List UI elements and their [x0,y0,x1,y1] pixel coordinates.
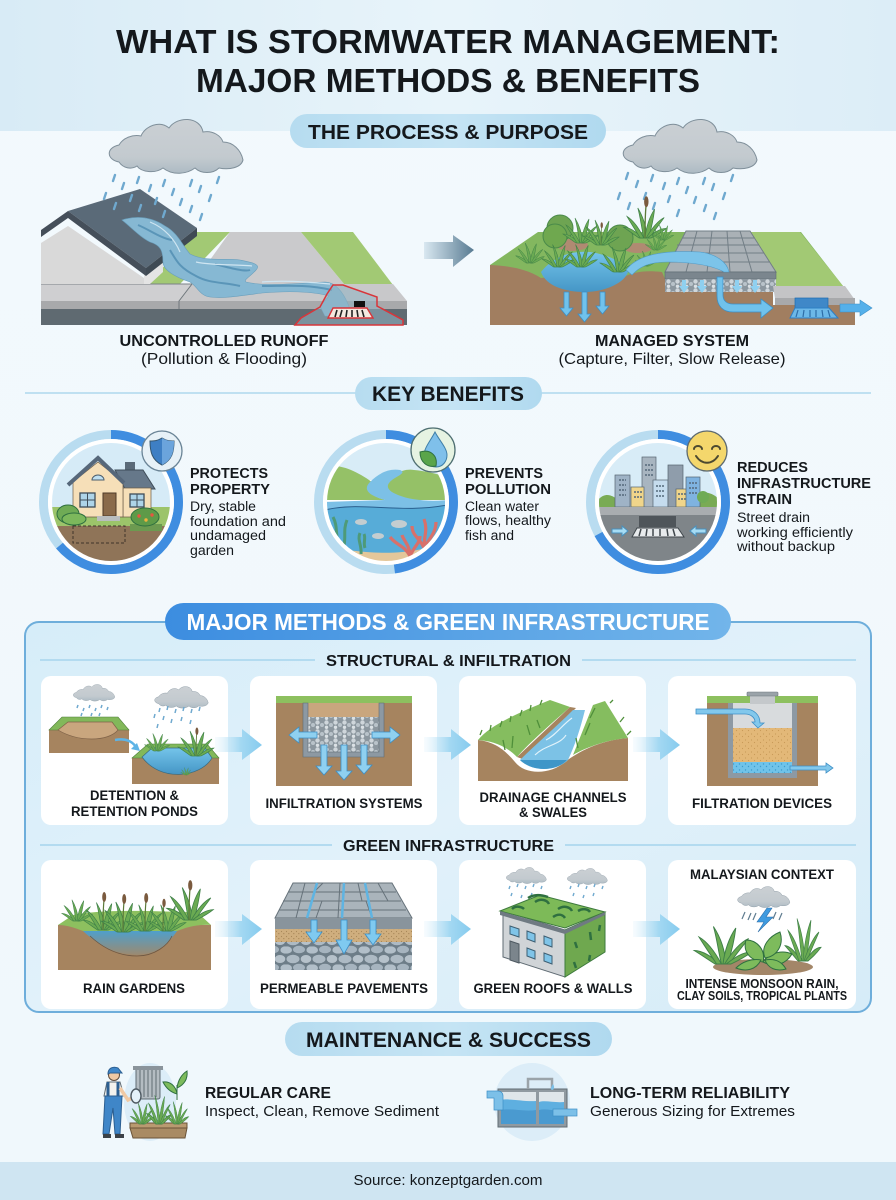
flow arrows [560,292,609,322]
river scene [325,440,447,566]
icon: oversized tank [487,1063,577,1141]
card: malaysian context: MALAYSIAN CONTEXT [690,867,835,882]
title: WHAT IS STORMWATER MANAGEMENT: [116,23,780,60]
caption: managed system: (Capture, Filter, Slow Release) [558,351,786,368]
title: MAJOR METHODS & BENEFITS [196,62,700,99]
card: rain gardens [41,860,228,1009]
text: regular care: REGULAR CARE [205,1085,331,1102]
text: prevents pollution: fish and [465,528,514,543]
panel frame [25,622,871,1012]
cloud right [623,119,757,173]
subheading: green infrastructure: GREEN INFRASTRUCTURE [343,838,554,855]
text: long-term reliability: Generous Sizing for Extremes [590,1103,795,1120]
section heading: key benefits [355,377,542,410]
card: infiltration systems [250,676,437,825]
icon: shield [142,431,182,471]
card: drainage channels and swales: & SWALES [519,805,587,820]
header band [0,0,896,131]
card: detention and retention ponds: DETENTION & [90,788,179,803]
caption: managed system: MANAGED SYSTEM [595,333,749,350]
panel heading: MAJOR METHODS & GREEN INFRASTRUCTURE [186,609,710,635]
card: filtration devices: FILTRATION DEVICES [692,796,832,811]
icon: smiley [687,431,727,471]
caption: managed system [558,333,786,368]
ground [147,232,230,284]
seaweed [333,517,365,554]
benefit: prevents pollution [318,428,551,570]
benefit: protects property [44,431,286,570]
text: protects property [190,466,286,558]
water flow on pavement [626,252,729,275]
pond [541,252,628,292]
city scene [598,440,720,565]
caption: uncontrolled runoff [120,333,329,368]
benefit: reduces infrastructure strain [590,431,871,570]
house scene [50,440,172,566]
arrows: between top row cards [215,729,680,760]
subheading: structural and infiltration: STRUCTURAL & INFILTRATION [326,653,571,670]
text: prevents pollution [465,466,551,543]
arrow: process direction [424,235,474,267]
clogged drain [295,285,403,325]
text: reduces infrastructure strain: STRAIN [737,492,792,508]
card: permeable pavements [250,860,437,1009]
section heading: key benefits: KEY BENEFITS [372,383,524,406]
title [116,23,780,99]
text: protects property: undamaged [190,528,266,543]
rain left [104,175,219,220]
text: protects property: Dry, stable [190,499,256,514]
section heading: maintenance and success [285,1022,612,1056]
text: prevents pollution: POLLUTION [465,482,551,498]
text: regular care [205,1085,440,1120]
section heading: maintenance and success: MAINTENANCE & SUCCESS [306,1029,591,1052]
text: reduces infrastructure strain: REDUCES [737,460,808,476]
text: protects property: garden [190,543,234,558]
text: protects property: PROPERTY [190,482,270,498]
permeable paving [665,231,776,272]
ring [318,434,454,570]
card: malaysian context: INTENSE MONSOON RAIN, [686,977,838,991]
card: malaysian context [668,860,856,1009]
plants [556,239,588,251]
card: detention and retention ponds: RETENTION PONDS [71,804,198,819]
curb and drain [773,286,855,305]
section heading: the process and purpose: THE PROCESS & PURPOSE [308,121,588,144]
text: reduces infrastructure strain: INFRASTRUCTURE [737,476,871,492]
text: protects property: PROTECTS [190,466,268,482]
source credit: Source: konzeptgarden.com [354,1173,542,1189]
icon: worker with filter and plants [103,1063,189,1141]
arrows: between bottom row cards [215,914,680,945]
water stream [122,218,352,316]
house [41,226,144,284]
card: drainage channels and swales [459,676,646,825]
icon: drop and leaf [411,428,455,472]
section heading: the process and purpose [290,114,606,148]
text: reduces infrastructure strain: working efficiently [736,525,853,540]
text: long-term reliability [590,1085,795,1120]
card: detention and retention ponds [41,676,228,825]
cloud left [109,119,243,173]
card: malaysian context: CLAY SOILS, TROPICAL PLANTS [677,988,847,1003]
text: reduces infrastructure strain [736,460,871,554]
soil [490,265,855,325]
footer band [0,1162,896,1200]
card: green roofs and walls: GREEN ROOFS & WALLS [474,981,632,996]
text: prevents pollution: Clean water [465,499,540,514]
panel: major methods and green infrastructure [25,603,871,1012]
card: green roofs and walls [459,860,646,1009]
card: drainage channels and swales: DRAINAGE CHANNELS [480,790,626,805]
caption: uncontrolled runoff: (Pollution & Flooding) [141,351,307,368]
caption: uncontrolled runoff: UNCONTROLLED RUNOFF [120,333,329,350]
coral [390,519,436,556]
text: long-term reliability: LONG-TERM RELIABILITY [590,1085,791,1102]
illustration: uncontrolled runoff [41,119,407,325]
text: prevents pollution: PREVENTS [465,466,543,482]
rain right [618,173,733,219]
text: prevents pollution: flows, healthy [465,513,551,528]
grass surface [490,232,843,286]
ring [44,434,178,570]
text: reduces infrastructure strain: without backup [736,539,835,554]
panel heading [165,603,731,640]
illustration: managed system [490,119,872,325]
text: regular care: Inspect, Clean, Remove Sediment [205,1103,440,1120]
card: infiltration systems: INFILTRATION SYSTEMS [266,796,422,811]
card: permeable pavements: PERMEABLE PAVEMENTS [260,981,428,996]
text: reduces infrastructure strain: Street drain [737,510,810,525]
ring [590,434,726,570]
card: filtration devices [668,676,856,825]
card: rain gardens: RAIN GARDENS [83,981,185,996]
text: protects property: foundation and [190,514,286,529]
